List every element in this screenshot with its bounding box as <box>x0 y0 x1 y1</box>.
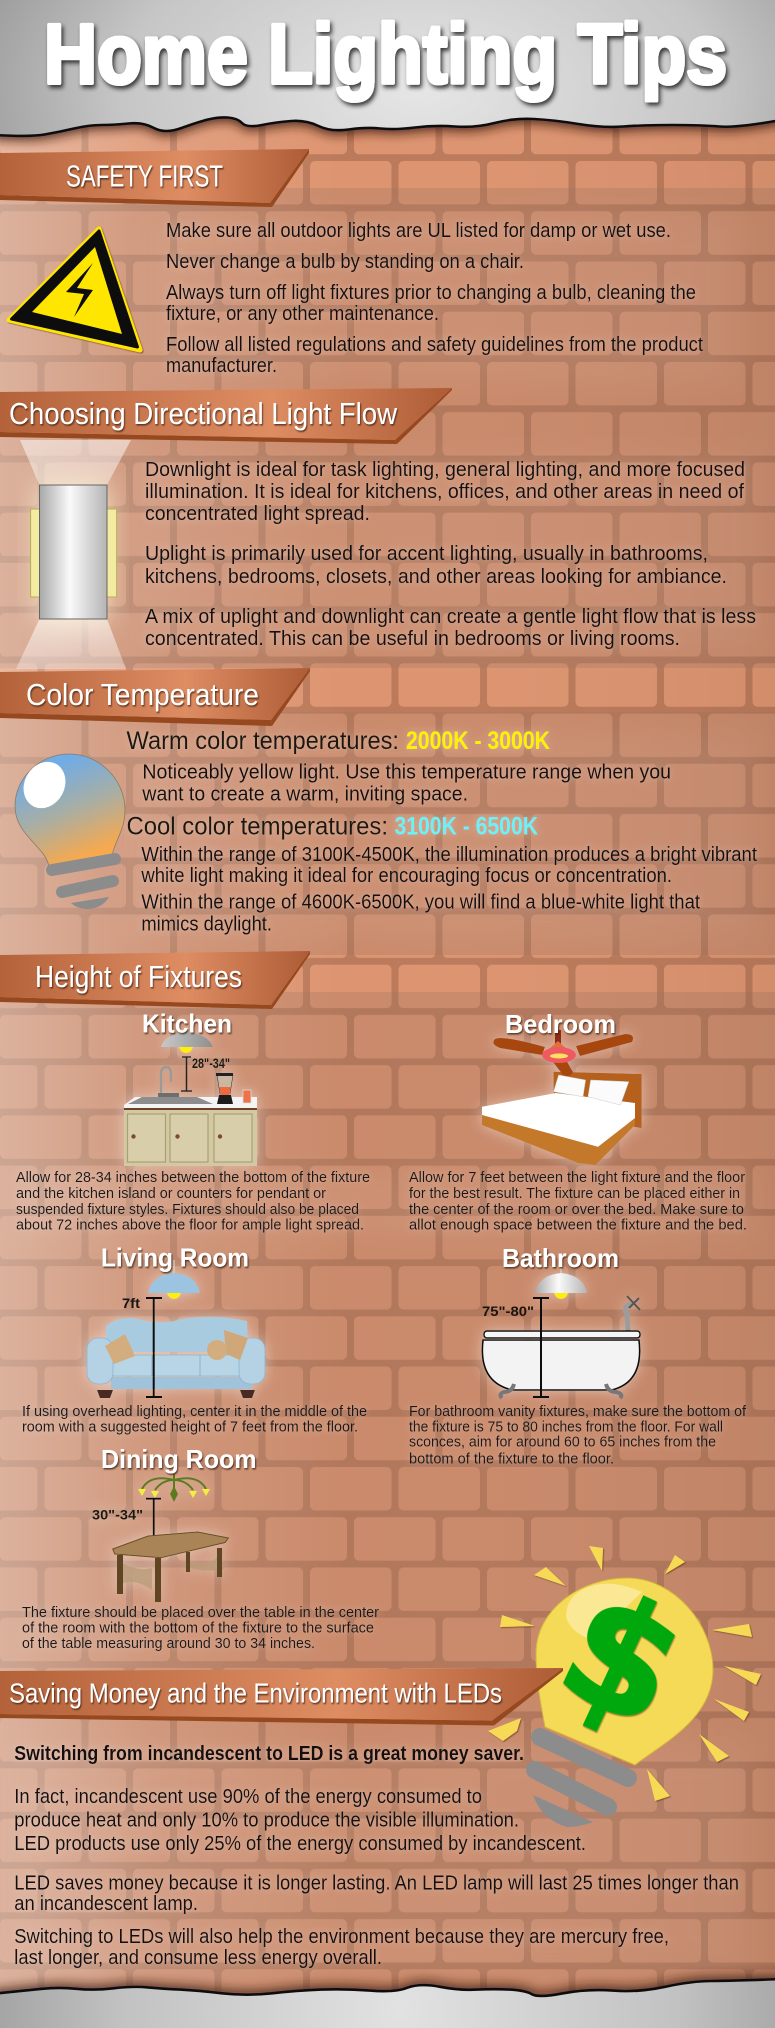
dining room block <box>22 1444 379 1652</box>
text block: LED savings: LED products use only 25% of the energy consumed by incandescent. <box>14 1833 586 1855</box>
text: bedroom guidance: the center of the room or over the bed. Make sure to <box>409 1202 744 1218</box>
illustration: bed and ceiling fan <box>482 1030 642 1165</box>
text block: LED savings: In fact, incandescent use 90% of the energy consumed to <box>14 1786 482 1808</box>
text block: warm and cool temperatures: Noticeably yellow light. Use this temperature range when you <box>142 762 671 784</box>
text: bathroom guidance: the fixture is 75 to 80 inches from the floor. For wall <box>409 1420 723 1436</box>
text block: downlight and uplight: kitchens, bedrooms, closets, and other areas looking for ambiance. <box>145 566 727 588</box>
bedroom block <box>409 1009 747 1234</box>
text block: warm and cool temperatures <box>126 727 757 936</box>
text block: downlight and uplight: illumination. It is ideal for kitchens, offices, and other areas in need of <box>145 481 744 503</box>
text block: warm and cool temperatures: white light making it ideal for encouraging focus or concentration. <box>140 865 672 887</box>
text block: downlight and uplight: Uplight is primarily used for accent lighting, usually in bathrooms, <box>145 543 708 565</box>
text: bathroom guidance: bottom of the fixture to the floor. <box>409 1452 614 1468</box>
panel: color temperature <box>0 668 757 936</box>
text block: warm and cool temperatures: want to create a warm, inviting space. <box>141 784 468 806</box>
ribbon: safety first <box>0 149 309 207</box>
text block: downlight and uplight <box>145 459 756 650</box>
text block: safety tips: Follow all listed regulations and safety guidelines from the product <box>166 334 703 356</box>
text block: LED savings: an incandescent lamp. <box>14 1893 198 1915</box>
text block: warm and cool temperatures: Within the range of 4600K-6500K, you will find a blue-white light that <box>141 892 700 914</box>
text block: LED savings: produce heat and only 10% to produce the visible illumination. <box>14 1810 519 1832</box>
text: bathroom guidance <box>409 1404 747 1468</box>
text block: LED savings <box>14 1743 739 1969</box>
ribbon: safety first: SAFETY FIRST <box>66 159 223 194</box>
panel: directional light flow <box>0 388 756 669</box>
icon: colour temperature bulb <box>15 754 125 909</box>
text block: warm and cool temperatures: 3100K - 6500K <box>394 813 538 841</box>
text block: LED savings: last longer, and consume less energy overall. <box>14 1947 382 1969</box>
label: 75-80 inches: 75"-80" <box>482 1303 534 1319</box>
text block: warm and cool temperatures: Cool color temperatures: <box>126 813 388 841</box>
text: living room guidance <box>22 1404 367 1436</box>
panel: safety first <box>0 149 703 377</box>
illustration: bathtub and pendant <box>482 1260 640 1398</box>
bathroom block <box>409 1243 747 1468</box>
text block: safety tips: Make sure all outdoor lights are UL listed for damp or wet use. <box>166 220 671 242</box>
illustration: kitchen counter and pendant <box>124 1032 257 1166</box>
living room block <box>22 1243 367 1436</box>
text: bedroom guidance: for the best result. The fixture can be placed either in <box>409 1186 740 1202</box>
icon: wall sconce with light cones <box>16 440 131 669</box>
text block: safety tips: fixture, or any other maintenance. <box>166 303 439 325</box>
text: kitchen guidance <box>16 1170 370 1234</box>
text block: safety tips <box>166 220 703 377</box>
text: kitchen guidance: about 72 inches above the floor for ample light spread. <box>16 1218 364 1234</box>
heading: bedroom: Bedroom <box>505 1009 616 1039</box>
text: bathroom guidance: sconces, aim for around 60 to 65 inches from the <box>409 1435 716 1451</box>
heading: kitchen: Kitchen <box>142 1009 232 1039</box>
top torn paper header <box>0 0 775 136</box>
icon: dollar light bulb with rays <box>488 1546 761 1827</box>
illustration: sofa and pendant <box>87 1260 265 1398</box>
kitchen block <box>16 1009 370 1234</box>
panel: height of fixtures <box>0 951 747 1652</box>
text: dining room guidance <box>22 1605 379 1652</box>
text: living room guidance: If using overhead lighting, center it in the middle of the <box>22 1404 367 1420</box>
text block: downlight and uplight: A mix of uplight and downlight can create a gentle light flow that is less <box>145 606 756 628</box>
text block: safety tips: Never change a bulb by standing on a chair. <box>166 251 524 273</box>
text block: safety tips: manufacturer. <box>166 355 277 377</box>
heading: bathroom: Bathroom <box>502 1243 619 1273</box>
ribbon: choosing directional light flow: Choosing Directional Light Flow <box>9 396 398 431</box>
text: dining room guidance: of the table measuring around 30 to 34 inches. <box>22 1636 315 1652</box>
text: bathroom guidance: For bathroom vanity fixtures, make sure the bottom of <box>409 1404 747 1420</box>
text: bedroom guidance: allot enough space between the fixture and the bed. <box>409 1218 747 1234</box>
icon: dollar light bulb with rays: $ <box>535 1553 709 1763</box>
illustration: table and chandelier <box>92 1474 228 1602</box>
heading: living room: Living Room <box>101 1243 249 1273</box>
ribbon: color temperature <box>0 668 310 726</box>
text: living room guidance: room with a suggested height of 7 feet from the floor. <box>22 1420 358 1436</box>
text: kitchen guidance: Allow for 28-34 inches between the bottom of the fixture <box>16 1170 370 1186</box>
text block: LED savings: Switching from incandescent to LED is a great money saver. <box>14 1743 524 1765</box>
text: kitchen guidance: suspended fixture styles. Fixtures should also be placed <box>16 1202 359 1218</box>
text: bedroom guidance: Allow for 7 feet between the light fixture and the floor <box>409 1170 745 1186</box>
bottom torn paper footer <box>0 1979 775 2028</box>
ribbon: height of fixtures <box>0 951 310 1009</box>
illustration: table and chandelier: 30"-34" <box>92 1507 143 1523</box>
illustration: kitchen counter and pendant: 28"-34" <box>192 1055 230 1071</box>
text block: safety tips: Always turn off light fixtures prior to changing a bulb, cleaning the <box>166 282 696 304</box>
text block: warm and cool temperatures: 2000K - 3000K <box>406 727 550 755</box>
text block: downlight and uplight: Downlight is ideal for task lighting, general lighting, and more focused <box>145 459 745 481</box>
ribbon: saving money and the environment <box>0 1668 563 1726</box>
ribbon: choosing directional light flow <box>0 388 452 444</box>
text block: LED savings: Switching to LEDs will also help the environment because they are mercury free, <box>14 1926 669 1948</box>
text: kitchen guidance: and the kitchen island or counters for pendant or <box>16 1186 326 1202</box>
text: dining room guidance: of the room with the bottom of the fixture to the surface <box>22 1620 374 1636</box>
text block: warm and cool temperatures: mimics daylight. <box>141 914 272 936</box>
text block: warm and cool temperatures: Warm color temperatures: <box>126 727 399 755</box>
text block: downlight and uplight: concentrated light spread. <box>145 503 370 525</box>
text: dining room guidance: The fixture should be placed over the table in the center <box>22 1605 379 1621</box>
icon: high voltage warning triangle <box>9 229 140 350</box>
ribbon: color temperature: Color Temperature <box>26 677 259 712</box>
panel: saving money with LEDs <box>0 1546 761 1969</box>
text: bedroom guidance <box>409 1170 747 1234</box>
ribbon: saving money and the environment: Saving Money and the Environment with LEDs <box>9 1678 502 1709</box>
label: 7ft: 7ft <box>122 1295 140 1311</box>
ribbon: height of fixtures: Height of Fixtures <box>35 959 242 994</box>
rays <box>488 1546 761 1801</box>
text block: downlight and uplight: concentrated. This can be useful in bedrooms or living rooms. <box>145 628 680 650</box>
heading: dining room: Dining Room <box>101 1444 256 1474</box>
